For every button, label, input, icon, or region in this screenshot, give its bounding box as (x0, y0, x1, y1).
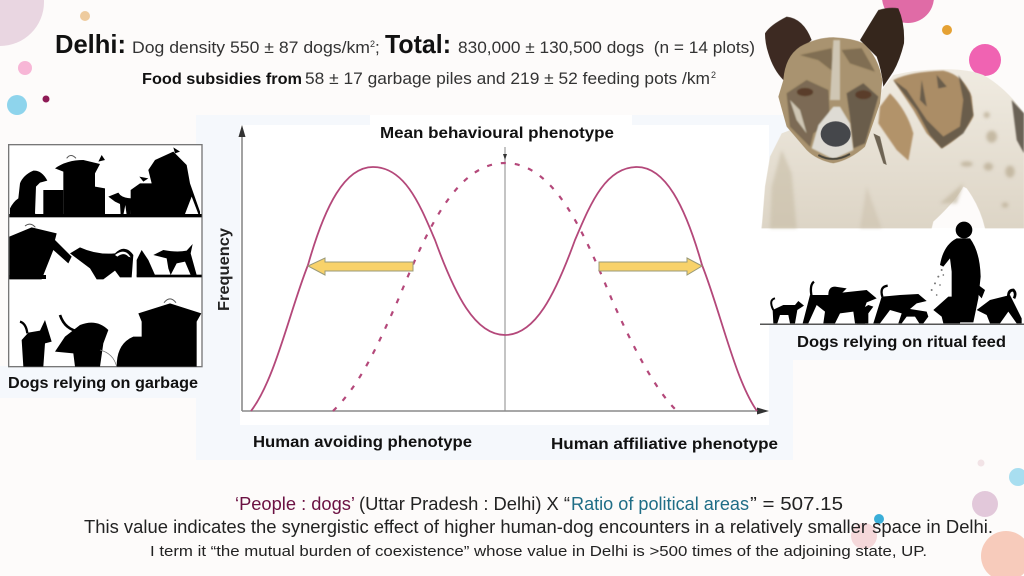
muzzle (812, 107, 853, 159)
eyes (797, 88, 813, 96)
silhouettes: dogs and garbage (9, 145, 202, 367)
subtitle: food subsidies: 2 (711, 70, 716, 80)
right ear (860, 8, 904, 87)
head (778, 37, 882, 163)
label: dogs relying on ritual feed: Dogs relying on ritual feed (797, 334, 1006, 351)
axis label: human avoiding phenotype: Human avoiding phenotype (253, 434, 472, 451)
panel: chart (196, 115, 793, 460)
white background (762, 228, 1024, 325)
chart background (196, 115, 793, 460)
axis label: frequency: Frequency (216, 228, 233, 311)
formula line: (Uttar Pradesh : Delhi) X “ (359, 494, 570, 514)
chin (818, 154, 850, 159)
title: Delhi statistics: Dog density 550 ± 87 dogs/km (132, 38, 370, 57)
subtitle: food subsidies (142, 70, 716, 88)
decorative circles: top left (0, 0, 90, 115)
head markings (787, 40, 878, 148)
heading: mean behavioural phenotype: Mean behavioural phenotype (380, 125, 614, 142)
panel: dogs relying on ritual feed (760, 222, 1024, 360)
label background (0, 366, 206, 398)
formula line (235, 494, 843, 514)
saddle patch (893, 71, 973, 148)
mean line (503, 147, 507, 411)
title: Delhi statistics: 2 (370, 39, 375, 49)
title: Delhi statistics (55, 29, 755, 59)
title: Delhi statistics: ; (375, 38, 380, 57)
formula line: Ratio of political areas (571, 494, 749, 514)
coexistence note: I term it “the mutual burden of coexistence” whose value in Delhi is >500 times of the adjoining state, UP. (150, 544, 927, 560)
left ear (765, 17, 812, 80)
body shading and spots (770, 112, 1015, 228)
title: Delhi statistics: Delhi: (55, 29, 126, 59)
formula line: ‘People : dogs’ (235, 494, 355, 514)
shoulder patch (878, 93, 913, 161)
rump shadow (1012, 100, 1024, 153)
subtitle: food subsidies: Food subsidies from (142, 71, 302, 88)
title: Delhi statistics: Total: (385, 29, 451, 59)
decorative circles: top right (882, 0, 1001, 76)
subtitle: food subsidies: 58 ± 17 garbage piles and 219 ± 52 feeding pots /km (305, 70, 710, 88)
saddle stripes (893, 75, 973, 148)
silhouettes: woman feeding dogs (760, 222, 1024, 325)
label: dogs relying on garbage: Dogs relying on garbage (8, 375, 198, 392)
dog body (762, 69, 1024, 228)
solid curve: bimodal distribution (251, 167, 757, 411)
arrow: toward human avoiding (308, 258, 413, 275)
neck stripe (873, 133, 887, 165)
title: Delhi statistics: 830,000 ± 130,500 dogs (n = 14 plots) (458, 38, 755, 57)
y axis (238, 125, 246, 411)
dashed curve: original distribution (333, 163, 677, 411)
arrow: toward human affiliative (599, 258, 702, 275)
x axis (242, 408, 769, 414)
photo: dog (762, 8, 1024, 228)
decorative circles: bottom right (851, 460, 1024, 576)
label background (769, 325, 1024, 360)
panel: dogs relying on garbage (0, 145, 206, 398)
axis label: human affiliative phenotype: Human affiliative phenotype (551, 436, 778, 453)
explanation line: This value indicates the synergistic effect of higher human-dog encounters in a relatively smaller space in Delhi. (84, 517, 993, 537)
formula line: ” = 507.15 (750, 494, 843, 514)
nose (821, 121, 851, 147)
